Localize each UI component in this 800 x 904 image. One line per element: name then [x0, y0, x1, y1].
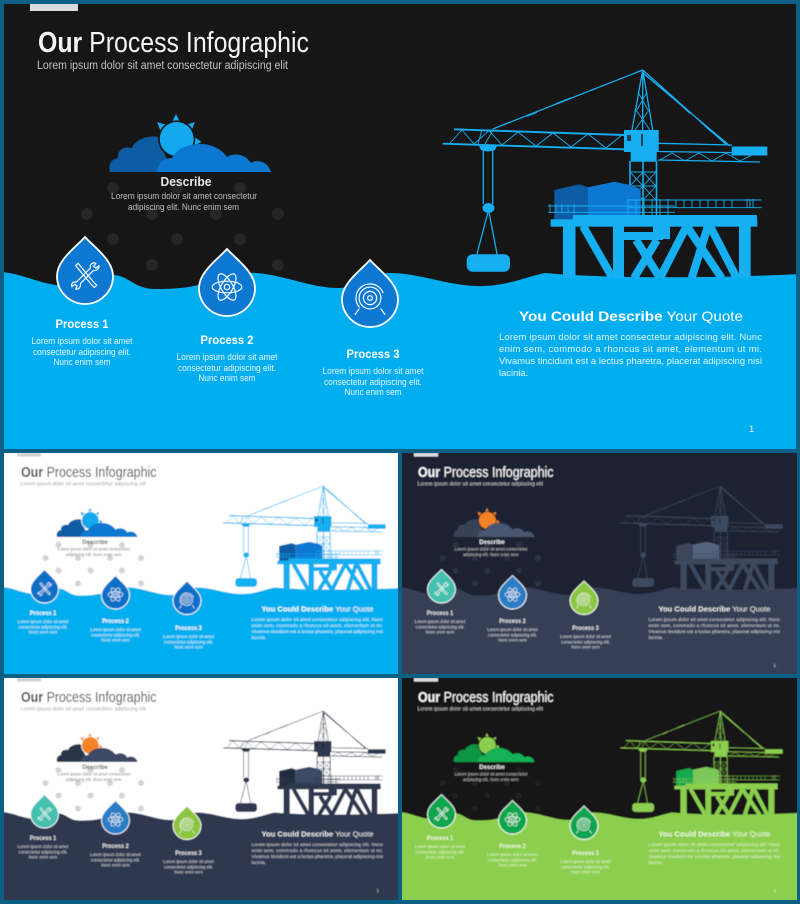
describe label: Describe: [479, 764, 505, 771]
page number: 1: [749, 423, 754, 434]
dotted rain pattern: [42, 542, 144, 586]
crane and oil platform illustration: [223, 711, 386, 815]
process 3 text: Nunc enim sem: [344, 387, 402, 397]
process 3 text: Nunc enim sem: [571, 870, 600, 874]
describe label: [111, 175, 257, 212]
process 2 text: Process 2: [200, 333, 254, 347]
process 2 text: consectetur adipiscing elit.: [488, 858, 537, 862]
process 2 text: [487, 844, 538, 868]
quote block: Lorem ipsum dolor sit amet consectetur adipiscing elit. Nunc: [648, 842, 781, 847]
quote block: enim sem, commodo a rhoncus sit amet, elementum ut mi.: [648, 848, 780, 853]
top tab: [414, 678, 438, 682]
process 3 text: consectetur adipiscing elit.: [561, 864, 610, 870]
process 3 text: consectetur adipiscing elit.: [164, 640, 213, 644]
quote block: enim sem, commodo a rhoncus sit amet, elementum ut mi.: [252, 623, 383, 628]
heading: Our Process Infographic: [418, 465, 554, 481]
describe label: Describe: [82, 539, 108, 546]
quote block: Vivamus tincidunt est a lectus pharetra, placerat adipiscing nisi: [648, 854, 780, 859]
process 2 text: Nunc enim sem: [498, 638, 527, 642]
process 3 drop: [342, 260, 398, 327]
describe label: [58, 764, 131, 782]
process 2 text: [90, 844, 141, 868]
top tab: [30, 4, 78, 11]
process 1 text: [18, 836, 69, 860]
process 2 text: Process 2: [499, 844, 526, 850]
process 1 text: consectetur adipiscing elit.: [18, 624, 68, 630]
describe label: [58, 539, 131, 557]
process 2 text: [176, 333, 278, 383]
process 1 text: consectetur adipiscing elit.: [416, 850, 464, 854]
process 2 text: Process 2: [102, 844, 129, 850]
process 2 text: Nunc enim sem: [198, 373, 256, 383]
process 1 drop: [30, 570, 58, 603]
process 1 drop: [30, 794, 58, 828]
process 3 text: [163, 626, 214, 650]
process 3 text: Process 3: [572, 626, 599, 632]
water wave: [2, 587, 402, 681]
quote block: [648, 606, 781, 640]
quote block: You Could Describe Your Quote: [658, 606, 771, 614]
heading: Our Process Infographic: [21, 690, 156, 706]
process 3 text: Process 3: [175, 851, 202, 857]
quote block: lacinia.: [648, 635, 663, 640]
process 2 drop: [102, 800, 130, 834]
crane and oil platform illustration: [620, 711, 783, 815]
describe label: Lorem ipsum dolor sit amet consectetur: [454, 772, 528, 776]
quote block: Vivamus tincidunt est a lectus pharetra, placerat adipiscing nisi: [648, 629, 780, 634]
process 3 text: Lorem ipsum dolor sit amet: [163, 859, 214, 864]
quote block: lacinia.: [499, 367, 528, 378]
process 2 text: Nunc enim sem: [101, 862, 130, 868]
describe label: adipiscing elit. Nunc enim sem: [66, 777, 122, 782]
process 3 text: consectetur adipiscing elit.: [324, 377, 422, 387]
process 2 text: Lorem ipsum dolor sit amet: [487, 852, 538, 857]
subheading: Lorem ipsum dolor sit amet consectetur adipiscing elit: [37, 60, 289, 72]
top tab: [17, 453, 41, 456]
dotted rain pattern: [81, 182, 284, 271]
process 3 text: consectetur adipiscing elit.: [561, 640, 610, 644]
process 2 drop: [498, 800, 526, 834]
process 2 text: Lorem ipsum dolor sit amet: [90, 852, 141, 857]
quote block: [499, 308, 762, 378]
process 1 text: Nunc enim sem: [54, 357, 110, 367]
crane and oil platform illustration: [620, 486, 783, 590]
quote block: enim sem, commodo a rhoncus sit amet, elementum ut mi.: [499, 343, 762, 354]
process 2 text: consectetur adipiscing elit.: [488, 632, 537, 638]
describe label: Describe: [479, 539, 505, 546]
process 3 text: Nunc enim sem: [174, 870, 203, 874]
water wave: [2, 812, 402, 904]
process 1 text: consectetur adipiscing elit.: [33, 347, 131, 357]
process 1 text: [18, 611, 69, 634]
dotted rain pattern: [440, 542, 541, 586]
heading: Our Process Infographic: [38, 27, 309, 59]
describe label: Lorem ipsum dolor sit amet consectetur: [58, 546, 131, 552]
process 1 text: Process 1: [427, 836, 454, 842]
process 1 text: Process 1: [30, 611, 57, 617]
quote block: lacinia.: [252, 860, 266, 865]
process 3 text: [163, 851, 214, 874]
panel: white slide with blue water: [2, 451, 402, 681]
process 2 drop: [199, 249, 255, 316]
process 2 text: Process 2: [102, 619, 129, 625]
process 2 text: Lorem ipsum dolor sit amet: [487, 627, 538, 632]
panel: main slide, dark with blue water: [0, 0, 800, 460]
process 1 text: Process 1: [427, 611, 454, 617]
page number: 1: [774, 888, 776, 893]
quote block: Lorem ipsum dolor sit amet consectetur adipiscing elit. Nunc: [252, 842, 384, 847]
process 3 text: Process 3: [572, 851, 599, 857]
quote block: Lorem ipsum dolor sit amet consectetur adipiscing elit. Nunc: [252, 617, 384, 622]
process 1 text: Nunc enim sem: [426, 854, 454, 860]
process 1 text: Lorem ipsum dolor sit amet: [32, 336, 133, 346]
process 3 text: Nunc enim sem: [174, 644, 203, 650]
describe label: [454, 764, 528, 782]
describe label: Lorem ipsum dolor sit amet consectetur: [111, 191, 257, 201]
top tab: [414, 453, 438, 456]
panel: white slide with navy water: [2, 676, 402, 904]
subheading: Lorem ipsum dolor sit amet consectetur adipiscing elit: [20, 482, 146, 488]
describe label: adipiscing elit. Nunc enim sem: [128, 202, 239, 212]
process 2 text: [90, 619, 141, 642]
icon: sun and cloud: [454, 508, 534, 537]
quote block: You Could Describe Your Quote: [262, 606, 374, 614]
quote block: [252, 832, 384, 865]
quote block: Vivamus tincidunt est a lectus pharetra, placerat adipiscing nisi: [499, 355, 762, 366]
describe label: Lorem ipsum dolor sit amet consectetur: [58, 772, 131, 776]
heading: Our Process Infographic: [21, 465, 156, 481]
describe label: Describe: [160, 175, 212, 189]
describe label: adipiscing elit. Nunc enim sem: [66, 552, 122, 557]
quote block: Vivamus tincidunt est a lectus pharetra, placerat adipiscing nisi: [252, 854, 383, 859]
quote block: Lorem ipsum dolor sit amet consectetur adipiscing elit. Nunc: [648, 617, 781, 622]
process 1 drop: [428, 570, 456, 603]
page number: 1: [774, 663, 776, 668]
process 3 text: [322, 347, 424, 397]
process 1 text: [415, 836, 466, 860]
describe label: adipiscing elit. Nunc enim sem: [463, 552, 519, 557]
process 3 text: Lorem ipsum dolor sit amet: [560, 634, 611, 639]
process 3 drop: [570, 806, 598, 840]
process 1 text: consectetur adipiscing elit.: [18, 850, 68, 854]
process 3 text: Lorem ipsum dolor sit amet: [560, 859, 611, 864]
describe label: [454, 539, 528, 557]
top tab: [17, 678, 41, 682]
process 3 drop: [570, 581, 598, 614]
process 3 text: [560, 626, 611, 650]
water wave: [399, 587, 799, 681]
quote block: lacinia.: [252, 635, 266, 640]
quote block: You Could Describe Your Quote: [519, 308, 743, 324]
describe label: Describe: [82, 764, 108, 771]
process 2 text: Process 2: [499, 619, 526, 625]
water wave: [399, 812, 799, 904]
process 3 drop: [173, 806, 201, 840]
panel: dark slide with green water: [399, 676, 799, 904]
process 2 text: Lorem ipsum dolor sit amet: [176, 352, 278, 362]
process 1 text: Nunc enim sem: [29, 854, 57, 860]
dotted rain pattern: [440, 767, 541, 812]
process 2 text: Nunc enim sem: [101, 638, 130, 642]
water wave: [0, 272, 800, 460]
process 2 text: [487, 619, 538, 642]
process 1 text: Lorem ipsum dolor sit amet: [18, 619, 69, 624]
quote block: enim sem, commodo a rhoncus sit amet, elementum ut mi.: [648, 623, 780, 628]
crane and oil platform illustration: [223, 486, 386, 590]
process 1 text: [415, 611, 466, 634]
quote block: [648, 832, 781, 865]
heading: Our Process Infographic: [418, 690, 554, 706]
process 2 drop: [102, 576, 130, 609]
process 3 text: Process 3: [175, 626, 202, 632]
process 1 text: Nunc enim sem: [29, 630, 57, 634]
quote block: You Could Describe Your Quote: [262, 832, 374, 838]
process 1 text: Process 1: [56, 317, 109, 331]
describe label: Lorem ipsum dolor sit amet consectetur: [454, 546, 528, 552]
quote block: enim sem, commodo a rhoncus sit amet, elementum ut mi.: [252, 848, 383, 853]
process 2 text: consectetur adipiscing elit.: [91, 632, 140, 638]
icon: sun and cloud: [109, 114, 271, 172]
process 1 text: Lorem ipsum dolor sit amet: [18, 844, 69, 849]
process 3 text: Nunc enim sem: [571, 644, 600, 650]
quote block: [252, 606, 384, 640]
process 1 drop: [428, 794, 456, 828]
process 1 drop: [57, 237, 113, 304]
icon: sun and cloud: [454, 733, 534, 762]
process 3 text: Process 3: [346, 347, 400, 361]
quote block: Vivamus tincidunt est a lectus pharetra, placerat adipiscing nisi: [252, 629, 383, 634]
process 3 text: Lorem ipsum dolor sit amet: [322, 366, 424, 376]
process 3 text: [560, 851, 611, 874]
process 1 text: Process 1: [30, 836, 57, 842]
process 2 drop: [498, 576, 526, 609]
subheading: Lorem ipsum dolor sit amet consectetur adipiscing elit: [418, 706, 543, 712]
process 1 text: [32, 317, 133, 367]
crane and oil platform illustration: [443, 70, 767, 278]
describe label: adipiscing elit. Nunc enim sem: [463, 777, 519, 782]
dotted rain pattern: [42, 767, 144, 812]
subheading: Lorem ipsum dolor sit amet consectetur adipiscing elit: [418, 482, 543, 488]
quote block: lacinia.: [648, 860, 663, 865]
quote block: You Could Describe Your Quote: [658, 832, 771, 838]
panel: navy slide with muted crane: [399, 451, 799, 681]
icon: sun and cloud: [57, 508, 137, 537]
icon: sun and cloud: [57, 733, 137, 762]
process 2 text: Nunc enim sem: [498, 862, 527, 868]
process 1 text: Lorem ipsum dolor sit amet: [415, 844, 466, 849]
process 1 text: consectetur adipiscing elit.: [416, 624, 464, 630]
quote block: Lorem ipsum dolor sit amet consectetur adipiscing elit. Nunc: [499, 331, 762, 342]
process 3 drop: [173, 581, 201, 614]
subheading: Lorem ipsum dolor sit amet consectetur adipiscing elit: [20, 706, 146, 712]
process 3 text: consectetur adipiscing elit.: [164, 864, 213, 870]
process 2 text: Lorem ipsum dolor sit amet: [90, 627, 141, 632]
process 3 text: Lorem ipsum dolor sit amet: [163, 634, 214, 639]
process 1 text: Lorem ipsum dolor sit amet: [415, 619, 466, 624]
process 1 text: Nunc enim sem: [426, 630, 454, 634]
page number: 1: [376, 888, 380, 893]
process 2 text: consectetur adipiscing elit.: [178, 363, 276, 373]
process 2 text: consectetur adipiscing elit.: [91, 858, 140, 862]
